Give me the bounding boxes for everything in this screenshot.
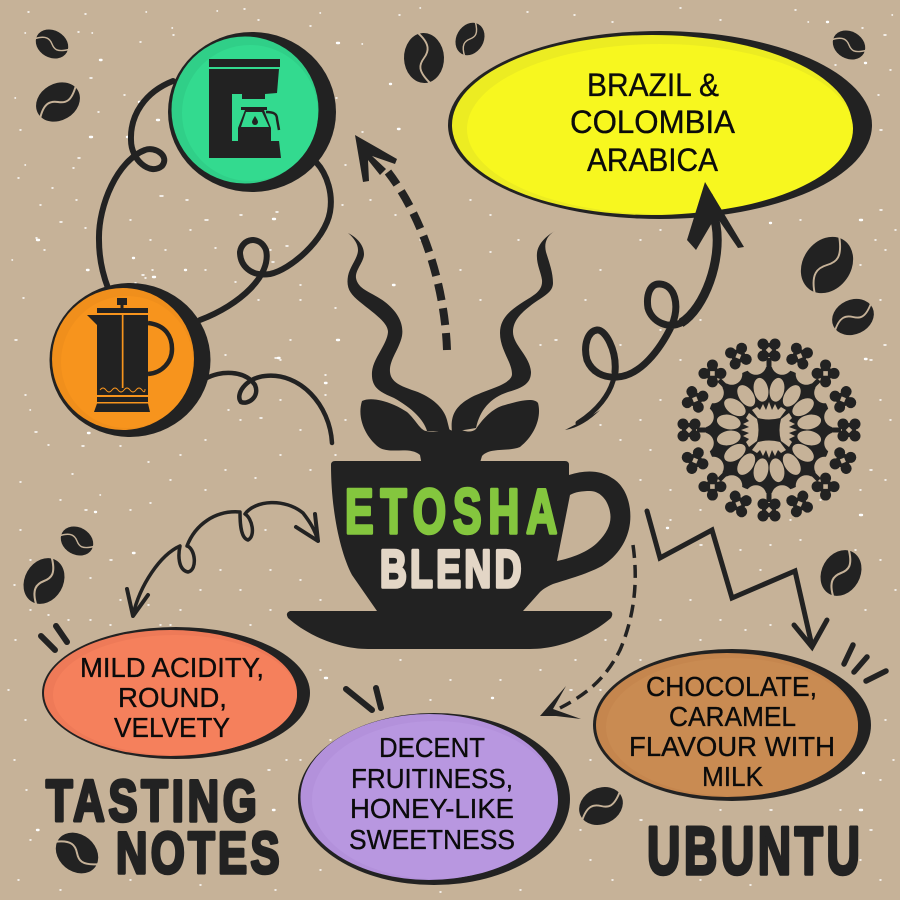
heading: Notes: NOTES [116, 821, 280, 885]
panel: chocolate oval [593, 649, 871, 801]
icon: emphasis ticks, fruitiness oval [346, 688, 381, 710]
panel: acidity oval: MILD ACIDITY, [80, 652, 264, 683]
illustration: coffee cup and saucer [287, 461, 630, 649]
icon: coffee bean [825, 292, 881, 342]
title: Etosha: ETOSHA [345, 477, 557, 547]
arrow: double-headed curly arrow to tasting notes [127, 503, 318, 616]
icon: coffee bean [789, 225, 865, 305]
arrow: curl from green circle to orange circle, right [200, 162, 331, 320]
icon: coffee bean [812, 542, 870, 604]
icon: coffee bean [47, 823, 107, 883]
panel: fruitiness oval: FRUITINESS, [351, 763, 513, 794]
icon: coffee bean [30, 23, 74, 65]
heading: Tasting: TASTING [46, 769, 257, 833]
panel: chocolate oval: CARAMEL [669, 701, 796, 732]
illustration: steam rising from cup [348, 231, 555, 432]
title: Blend: BLEND [380, 539, 521, 599]
panel: origin oval: ARABICA [587, 142, 719, 178]
icon: emphasis ticks, chocolate oval [844, 645, 886, 681]
panel: fruitiness oval [298, 713, 570, 885]
icon: coffee bean [572, 780, 630, 832]
icon: coffee bean [827, 24, 871, 66]
panel: fruitiness oval: SWEETNESS [349, 824, 515, 855]
panel: chocolate oval: MILK [702, 761, 763, 792]
panel: chocolate oval: CHOCOLATE, [646, 671, 817, 702]
icon: emphasis ticks, acidity oval [41, 626, 67, 650]
icon: coffee bean [28, 74, 88, 130]
panel: origin oval: BRAZIL & [587, 67, 719, 103]
arrow: zigzag to chocolate oval [647, 511, 827, 647]
arrow: curly arrow to origin oval [565, 182, 744, 430]
panel: acidity oval [42, 627, 310, 759]
panel: origin oval [448, 31, 872, 219]
panel: fruitiness oval: HONEY-LIKE [350, 793, 514, 824]
arrow: dashed arrow up to green circle [355, 135, 447, 350]
arrow: thin dashed arrow to fruitiness oval [540, 545, 635, 719]
icon: drip coffee maker circle [168, 32, 336, 192]
panel: origin oval: COLOMBIA [570, 104, 736, 140]
arrow: curl from orange circle to cup [205, 373, 332, 443]
illustration: leaves above cup [360, 399, 539, 466]
icon: coffee bean [403, 31, 445, 85]
panel: chocolate oval: FLAVOUR WITH [629, 731, 835, 762]
icon: coffee bean [449, 17, 491, 61]
panel: fruitiness oval: DECENT [379, 732, 485, 763]
heading: Ubuntu: UBUNTU [647, 813, 860, 889]
icon: french press circle [50, 283, 210, 437]
icon: coffee bean [15, 550, 73, 612]
arrow: curl from green circle to orange circle, left [99, 81, 173, 288]
panel: acidity oval: ROUND, [118, 682, 227, 713]
panel: acidity oval: VELVETY [114, 712, 230, 743]
illustration: mandala [678, 338, 860, 522]
icon: coffee bean [55, 520, 99, 562]
